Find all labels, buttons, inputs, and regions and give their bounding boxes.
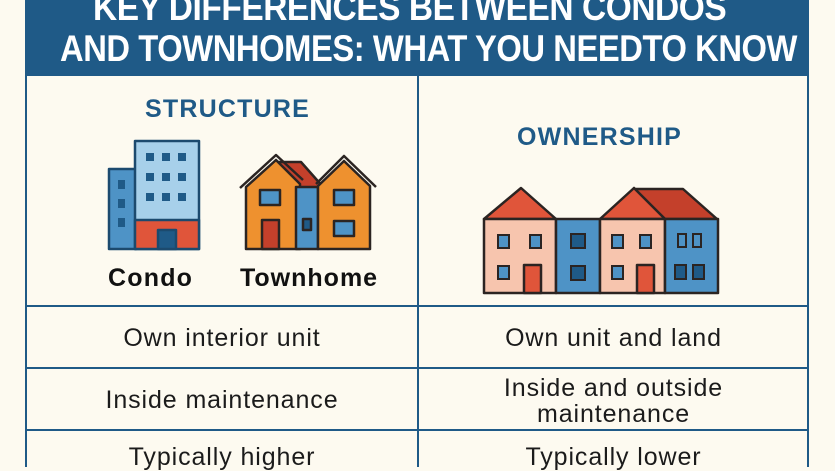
row 2 right: Inside and outside [504, 374, 723, 402]
row 3 right: Typically lower [525, 443, 702, 471]
title: AND TOWNHOMES: WHAT YOU NEEDTO KNOW [60, 28, 797, 69]
row 2 right [504, 374, 723, 428]
row 1 right: Own unit and land [505, 324, 722, 352]
icon: townhome [239, 154, 377, 250]
label: condo: Condo [108, 264, 193, 292]
header banner [25, 0, 809, 76]
icon: row houses [482, 186, 720, 294]
label: townhome: Townhome [240, 264, 378, 292]
row 1 left: Own interior unit [123, 324, 321, 352]
row 2 right: maintenance [537, 400, 690, 428]
icon: condo building [108, 140, 200, 250]
title [60, 0, 798, 69]
heading: ownership: OWNERSHIP [517, 123, 682, 151]
heading: structure: STRUCTURE [145, 95, 310, 123]
row 2 left: Inside maintenance [105, 386, 338, 414]
row 3 left: Typically higher [129, 443, 315, 471]
